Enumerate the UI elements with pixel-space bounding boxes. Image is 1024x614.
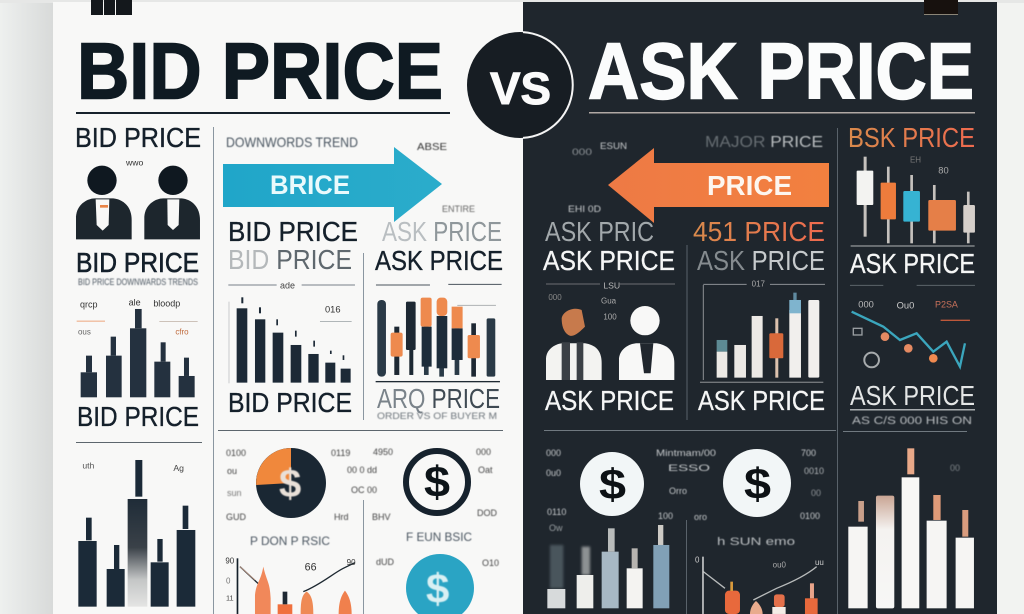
chart: orange candles right bottom: 0 xyxy=(695,555,700,564)
chart: declining bars xyxy=(228,280,355,383)
panel: ask price dark side xyxy=(523,2,997,614)
icon: white dollar coin two xyxy=(723,449,791,517)
small labels ask lower: 00 xyxy=(811,488,821,498)
icon: teal dollar coin xyxy=(406,554,474,614)
bid price label: BID PRICE xyxy=(228,216,358,247)
chart: orange candles right bottom: uu xyxy=(815,558,824,567)
caption: right lower: F EUN BSIC xyxy=(406,530,472,544)
icon: orange dark pie with dollar: $ xyxy=(279,462,301,506)
chart: bottom left tall bars xyxy=(78,460,195,607)
small labels bid lower: 00 0 dd xyxy=(347,465,377,475)
chart: orange candles left bottom: 0 xyxy=(226,576,231,585)
small note xyxy=(417,142,475,214)
vs badge xyxy=(467,32,573,138)
chart: orange candles left bottom xyxy=(225,556,356,614)
chart: bid bars left: bloodp xyxy=(153,299,180,309)
small labels ask lower: 0u0 xyxy=(546,468,561,478)
arrow: orange leftward: PRICE xyxy=(707,170,792,201)
small labels bid lower: BHV xyxy=(372,512,391,522)
small labels ask lower: 00 xyxy=(950,463,960,473)
chart: ask rising bars: 017 xyxy=(752,280,766,289)
dividers xyxy=(76,127,967,614)
chart: bid bars left: cfro xyxy=(175,327,189,336)
caption: ask lower chart: h SUN emo xyxy=(717,536,795,548)
icon: dollar ring xyxy=(406,451,468,513)
chart: colored candles top right: EH xyxy=(910,156,921,165)
chart: orange candles right bottom xyxy=(695,555,824,614)
small labels bid lower: ou xyxy=(227,466,237,476)
arrow: blue rightward: BRICE xyxy=(270,170,350,200)
small labels on ask top: 000 xyxy=(572,147,592,157)
small labels bid lower xyxy=(226,447,499,568)
icon: two sellers: 000 xyxy=(548,293,562,302)
small labels ask lower: Ow xyxy=(549,523,563,533)
arrow: blue rightward xyxy=(223,147,442,222)
ask price label right: ASK PRICE xyxy=(850,248,975,279)
small labels ask lower xyxy=(546,448,960,533)
chart: bid bars left: qrcp xyxy=(80,300,97,310)
ask price label: ASK PRICE xyxy=(375,245,503,276)
chart: candlesticks left xyxy=(376,284,502,382)
chart: ask rising bars xyxy=(700,280,825,383)
icon: white dollar coin one: $ xyxy=(599,461,626,509)
small labels ask lower: Mintmam/00 xyxy=(656,448,716,458)
blurred caption with rule xyxy=(850,409,975,427)
chart: colored candles top right: 80 xyxy=(938,165,949,175)
small labels on ask top: EHI 0D xyxy=(568,204,602,214)
small caption: BID PRICE DOWNWARDS TRENDS xyxy=(78,277,198,287)
title: ask price: ASK PRICE xyxy=(588,26,974,116)
ask price grey label: ASK PRICE xyxy=(697,245,825,276)
ask side heading: BSK PRICE xyxy=(848,122,975,153)
red label: 451 PRICE xyxy=(693,216,825,247)
icon: two sellers xyxy=(546,280,675,380)
small labels ask lower: 0110 xyxy=(547,507,566,517)
left binder clip xyxy=(91,0,132,15)
small labels bid lower: dUD xyxy=(376,557,395,567)
chart: declining bars: 016 xyxy=(325,305,341,315)
bid price label lower: BID PRICE xyxy=(77,401,199,432)
chart: teal line: Ou0 xyxy=(897,300,914,310)
small labels bid lower: 0100 xyxy=(226,448,246,458)
small labels bid lower: 000 xyxy=(476,447,491,457)
small labels bid lower: GUD xyxy=(226,512,246,522)
small labels bid lower: OC 00 xyxy=(351,485,377,495)
chart: fading ask bars xyxy=(547,525,669,608)
small labels bid lower: 4950 xyxy=(373,447,393,457)
small labels ask lower: 000 xyxy=(546,448,561,458)
chart: declining bars: ade xyxy=(280,280,295,290)
chart: orange candles right bottom: ou0 xyxy=(773,561,787,570)
chart: tall white bars xyxy=(848,448,974,608)
ask price label: ASK PRICE xyxy=(850,380,975,411)
caption: left lower chart: P DON P RSIC xyxy=(250,534,330,548)
chart: teal line: 000 xyxy=(858,299,874,309)
small labels ask lower: 0100 xyxy=(800,511,820,521)
chart: teal line xyxy=(852,299,970,367)
icon: teal dollar coin: $ xyxy=(426,565,449,612)
bid price label: BID PRICE xyxy=(228,387,352,418)
small labels on ask top: ESUN xyxy=(600,141,627,151)
small labels ask lower: 100 xyxy=(658,511,673,521)
arrow: orange leftward xyxy=(608,148,829,223)
chart: teal line: P2SA xyxy=(935,299,958,309)
icon: orange dark pie with dollar xyxy=(256,448,326,518)
chart: bottom left tall bars: Ag xyxy=(173,463,184,473)
small labels bid lower: O10 xyxy=(482,558,499,568)
chart: orange candles left bottom: 66 xyxy=(305,561,317,573)
right binder clip xyxy=(924,0,958,15)
small labels bid lower: Oat xyxy=(478,465,493,475)
vs badge: VS xyxy=(490,63,551,114)
ask price label: ASK PRICE xyxy=(543,245,675,276)
small labels ask lower: 700 xyxy=(801,448,816,458)
icon: dollar ring: $ xyxy=(424,458,450,507)
chart: bid bars left: ale xyxy=(129,298,141,308)
chart: bottom left tall bars: uth xyxy=(82,460,95,470)
chart: orange candles left bottom: 90 xyxy=(347,558,356,567)
small note: ENTIRE xyxy=(442,204,475,214)
small labels ask lower: oro xyxy=(694,512,707,522)
icon: two sellers: 100 xyxy=(603,312,617,321)
ask price faint label: ASK PRICE xyxy=(382,216,502,247)
icon: two bidders xyxy=(76,157,200,239)
chart: orange candles left bottom: 11 xyxy=(226,594,234,603)
small labels bid lower: 0119 xyxy=(331,448,350,458)
chart: orange candles left bottom: 90 xyxy=(225,556,235,565)
ask price faint label: ASK PRIC xyxy=(545,216,654,247)
icon: white dollar coin two: $ xyxy=(744,460,771,509)
icon: two sellers: Gua xyxy=(601,296,617,305)
chart: bid bars left: ous xyxy=(78,327,91,336)
bid price label: BID PRICE xyxy=(76,247,199,278)
header rules xyxy=(76,112,975,114)
chart: colored candles top right xyxy=(850,156,975,285)
small labels bid lower: DOD xyxy=(477,508,498,518)
bid price faint label: BID PRICE xyxy=(228,244,352,275)
chart: bid bars left xyxy=(77,298,198,397)
small labels bid lower: Hrd xyxy=(334,512,349,522)
downward subtitle: DOWNWORDS TREND xyxy=(226,134,358,150)
ask price label: ASK PRICE xyxy=(545,385,674,416)
icon: two bidders: wwo xyxy=(125,157,143,167)
small labels on ask top xyxy=(568,141,627,214)
small note: ABSE xyxy=(417,142,447,153)
small labels bid lower: sun xyxy=(227,488,242,498)
small labels ask lower: ESSO xyxy=(668,463,710,473)
small labels ask lower: 0010 xyxy=(804,466,824,476)
ask price blurred label: ARQ PRICE xyxy=(377,383,500,414)
small labels ask lower: Orro xyxy=(669,486,687,496)
panel: bid price white side xyxy=(53,2,523,614)
icon: white dollar coin one xyxy=(580,452,644,516)
title: bid price: BID PRICE xyxy=(77,26,443,116)
blurred caption with rule: AS C/S 000 HIS ON xyxy=(852,415,972,427)
ask subtitle: MAJOR PRICE xyxy=(705,134,823,151)
blurred caption: ORDER VS OF BUYER M xyxy=(377,411,497,421)
left column heading: BID PRICE xyxy=(75,122,201,153)
ask price label: ASK PRICE xyxy=(698,385,825,416)
icon: two sellers: LSU xyxy=(603,280,620,290)
